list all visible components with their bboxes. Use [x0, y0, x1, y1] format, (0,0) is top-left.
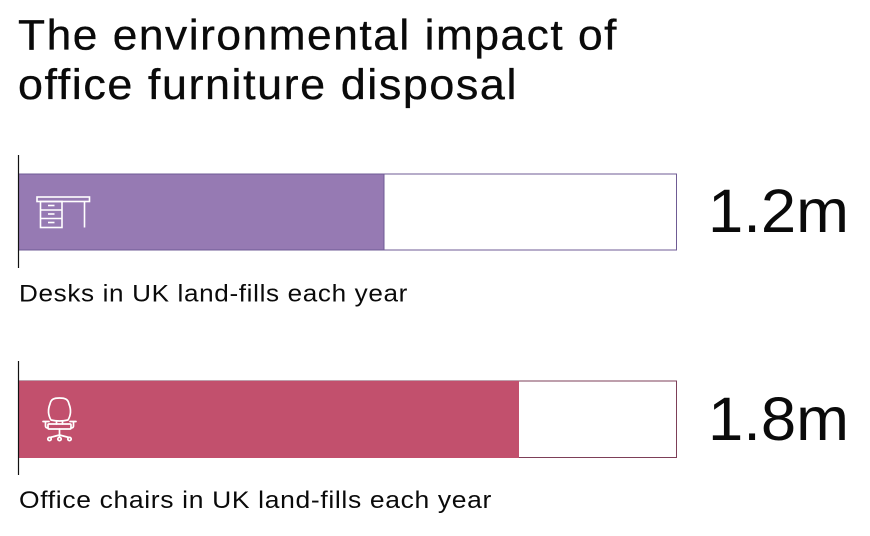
- title: [18, 12, 618, 109]
- axis line: chairs: [18, 361, 20, 475]
- bar track: desks: [18, 174, 676, 250]
- title: The environmental impact of: [18, 12, 618, 60]
- bar fill: chairs 1.8m: [18, 381, 519, 458]
- icon: desk: [37, 197, 90, 228]
- icon: office chair: [43, 398, 76, 441]
- panel: office chairs: [18, 361, 849, 514]
- title: office furniture disposal: [18, 61, 518, 109]
- caption: chairs: Office chairs in UK land-fills each year: [19, 487, 492, 514]
- caption: desks: Desks in UK land-fills each year: [19, 280, 408, 308]
- panel: desks: [18, 155, 849, 308]
- bar track: chairs: [18, 381, 676, 458]
- axis line: desks: [18, 155, 20, 268]
- value: 1.8m: 1.8m: [708, 385, 849, 453]
- bar fill: desks 1.2m: [18, 174, 384, 250]
- value: 1.2m: 1.2m: [708, 177, 849, 245]
